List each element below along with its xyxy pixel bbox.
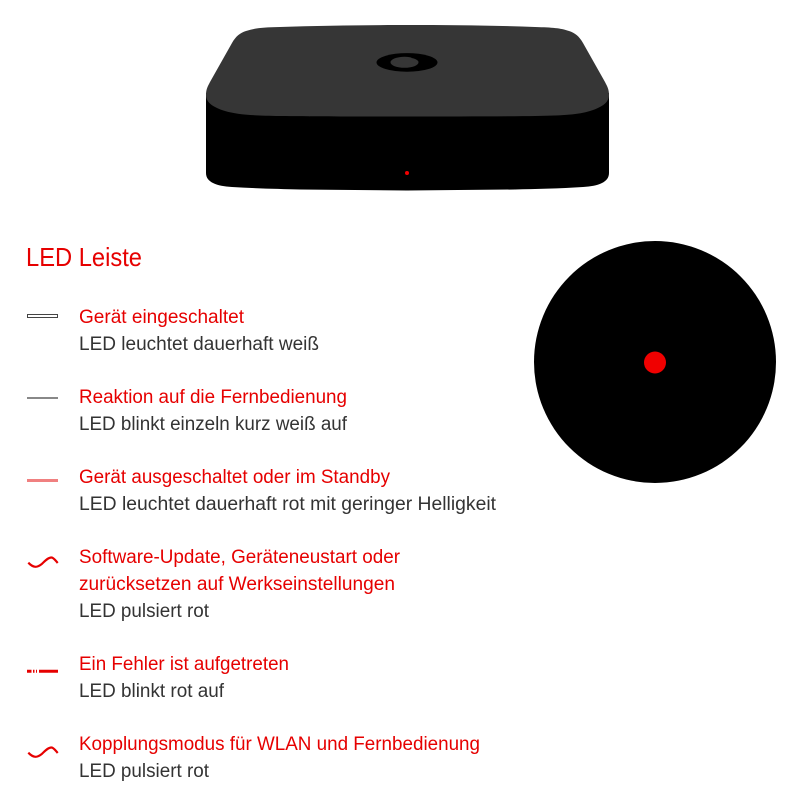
row description: LED blinkt einzeln kurz weiß auf [79, 414, 348, 435]
row description: LED blinkt rot auf [79, 681, 225, 702]
row title: Gerät ausgeschaltet oder im Standby [79, 467, 390, 488]
row title: Software-Update, Geräteneustart oder [79, 547, 401, 568]
legend row: remote reaction [27, 387, 348, 435]
row title: Gerät eingeschaltet [79, 307, 245, 328]
row title: Ein Fehler ist aufgetreten [79, 654, 289, 675]
icon: dim red line [27, 479, 58, 482]
icon: logo on device [376, 53, 438, 72]
row title: Kopplungsmodus für WLAN und Fernbedienung [79, 734, 480, 755]
icon: white double line [28, 314, 58, 318]
row description: LED leuchtet dauerhaft weiß [79, 334, 319, 355]
icon: grey line [27, 397, 58, 399]
legend row: standby [27, 467, 497, 515]
heading: LED Leiste [26, 242, 142, 272]
row description: LED pulsiert rot [79, 761, 210, 782]
device top face [206, 25, 609, 116]
row title: Reaktion auf die Fernbedienung [79, 387, 347, 408]
icon: red wave [28, 558, 58, 567]
LED indicator on device [405, 171, 409, 175]
icon: red wave [28, 748, 58, 757]
icon: red broken line [27, 670, 58, 673]
legend row: pairing mode [28, 734, 480, 782]
row description: LED leuchtet dauerhaft rot mit geringer Helligkeit [79, 494, 497, 515]
legend row: software update: zurücksetzen auf Werkseinstellungen [79, 574, 395, 595]
device illustration: set-top box [206, 25, 609, 190]
LED close-up circle [534, 241, 776, 483]
row description: LED pulsiert rot [79, 601, 210, 622]
legend row: software update [28, 547, 401, 622]
legend row: error [27, 654, 289, 702]
red LED dot [644, 352, 666, 374]
legend row: device on [28, 307, 319, 355]
device body [206, 93, 609, 190]
